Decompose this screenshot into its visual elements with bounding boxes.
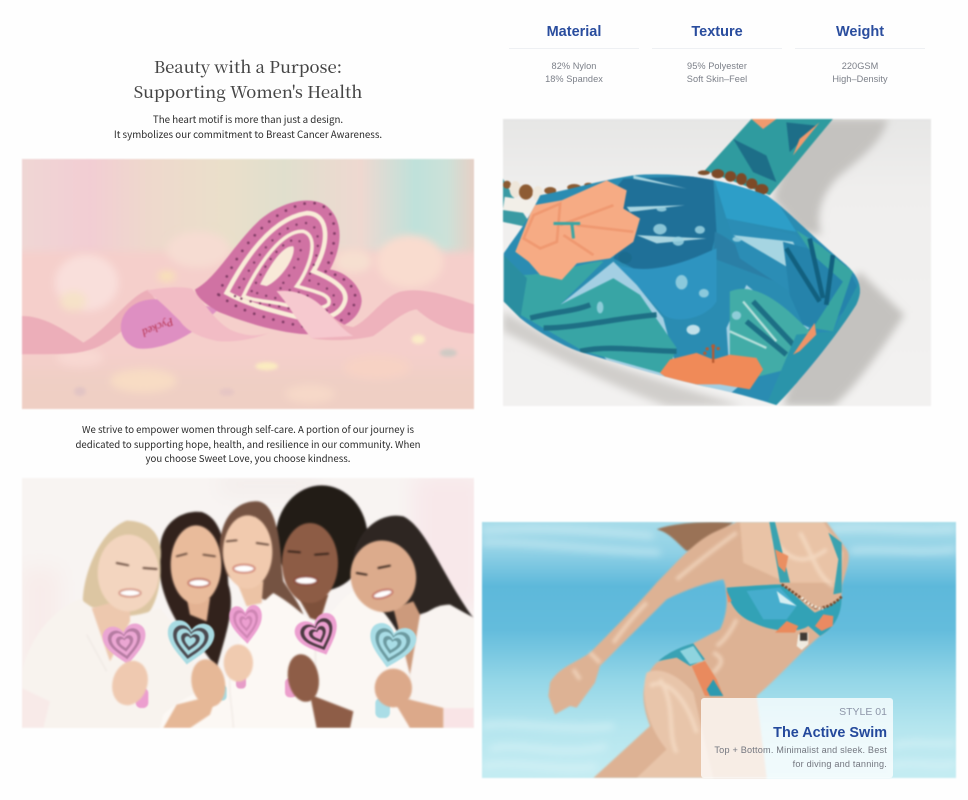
caption text — [714, 745, 887, 769]
spec: weight — [795, 24, 925, 84]
ribbon: right band — [277, 290, 474, 340]
body paragraph: you choose Sweet Love, you choose kindness. — [146, 451, 350, 465]
hair back layer — [83, 485, 473, 668]
ribbon: left tail and rising band — [22, 289, 157, 354]
title — [134, 54, 362, 103]
title: Beauty with a Purpose: — [154, 54, 342, 78]
eyes, brows and smiles — [117, 540, 393, 600]
brush handle — [121, 299, 217, 349]
strap — [705, 119, 833, 195]
caption label: STYLE 01 — [839, 706, 887, 718]
caption heading: The Active Swim — [773, 725, 887, 741]
forearms — [163, 695, 443, 728]
body — [548, 522, 849, 778]
body paragraph: dedicated to supporting hope, health, and resilience in our community. When — [75, 436, 421, 450]
spec: material — [509, 24, 639, 84]
spec: material: Material — [547, 24, 601, 40]
faces — [98, 515, 423, 618]
caption text: Top + Bottom. Minimalist and sleek. Best — [714, 745, 887, 755]
spec: texture — [652, 24, 782, 84]
photo: underwater swimmer in bikini — [481, 521, 957, 779]
water drops — [597, 207, 742, 335]
flower: lower orange hibiscus — [660, 353, 763, 389]
spec: texture: 95% Polyester — [687, 61, 747, 71]
bikini bottom — [658, 643, 723, 696]
intro text — [114, 112, 382, 140]
light ripples — [482, 528, 956, 768]
shadows — [503, 119, 904, 406]
heart brushes — [101, 605, 418, 718]
necks — [92, 581, 420, 675]
spec: weight: Weight — [836, 24, 884, 40]
bikini cup — [500, 165, 866, 408]
title: Supporting Women's Health — [134, 79, 362, 103]
spec: weight: 220GSM — [842, 61, 878, 71]
flower: large peach hibiscus — [515, 180, 640, 280]
spec: texture: Soft Skin–Feel — [687, 74, 747, 84]
photo: five smiling women holding heart brushes — [22, 478, 474, 729]
photo: heart brush with pink ribbon — [21, 158, 475, 410]
intro text: The heart motif is more than just a design. — [153, 112, 343, 126]
spec: weight: High–Density — [832, 74, 888, 84]
ribbon: over handle — [147, 287, 270, 341]
spec: material: 18% Spandex — [545, 74, 603, 84]
caption text: for diving and tanning. — [793, 758, 887, 768]
spec: material: 82% Nylon — [552, 61, 596, 71]
bikini top — [726, 522, 842, 636]
sun caustics — [573, 533, 833, 753]
spec: texture: Texture — [691, 24, 743, 40]
photo: wet tropical print bikini cup with wooden beads — [502, 118, 932, 406]
shell pendant — [797, 633, 808, 650]
intro text: It symbolizes our commitment to Breast Cancer Awareness. — [114, 126, 382, 140]
body paragraph: We strive to empower women through self-care. A portion of our journey is — [82, 422, 414, 436]
shirts — [22, 590, 474, 730]
wooden beads — [503, 169, 768, 228]
hands gripping handles — [107, 644, 412, 710]
hair — [657, 522, 733, 551]
caption card — [701, 698, 893, 778]
brush head — [195, 201, 362, 334]
brush handle: Pycked — [140, 315, 176, 338]
body paragraph — [75, 422, 421, 465]
